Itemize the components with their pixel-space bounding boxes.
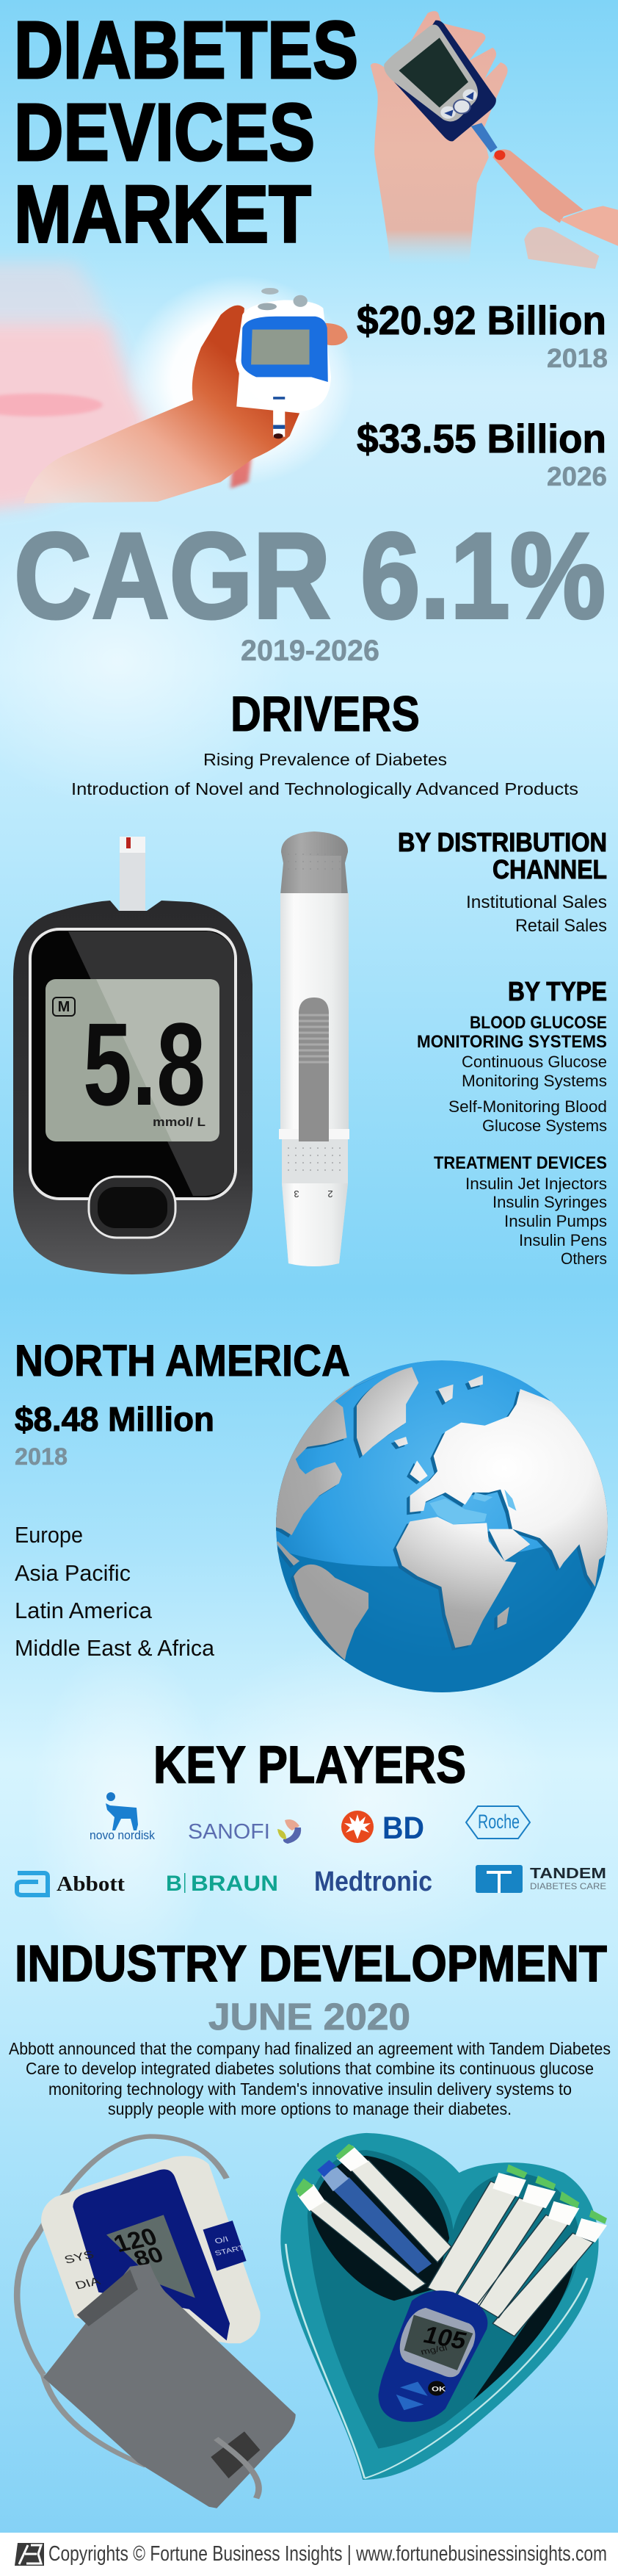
logo: Sanofi — [188, 1819, 301, 1844]
CAGR heading: 2019-2026 — [241, 635, 379, 667]
logo: Tandem: DIABETES CARE — [530, 1881, 606, 1891]
illustration: blood pressure monitor: O/I — [214, 2234, 230, 2245]
stat: 2026 market value: 2026 — [547, 461, 607, 491]
industry development body text: monitoring technology with Tandem's innovative insulin delivery systems to — [48, 2079, 572, 2099]
regional block: $8.48 Million — [15, 1400, 214, 1438]
handheld meter: 105 — [420, 2321, 470, 2355]
logo: BD: BD — [382, 1811, 424, 1846]
cuff — [43, 2264, 296, 2508]
logo: Roche — [466, 1806, 530, 1839]
illustration: blood pressure monitor: 120 — [109, 2223, 161, 2258]
icon: Fortune Business Insights logo — [15, 2543, 44, 2566]
logo: Medtronic: Medtronic — [314, 1866, 432, 1897]
illustration: blood pressure monitor: SYS — [62, 2248, 96, 2266]
regional block: Latin America — [15, 1598, 153, 1623]
illustration: blood pressure monitor — [17, 2137, 296, 2508]
drivers — [71, 686, 578, 798]
drivers: DRIVERS — [230, 686, 420, 742]
insulin pens — [296, 2144, 607, 2337]
handheld meter — [379, 2290, 487, 2422]
title: MARKET — [14, 169, 311, 260]
segments: by type: MONITORING SYSTEMS — [417, 1032, 607, 1052]
stat: 2018 market value — [357, 297, 608, 373]
segments: by type — [417, 976, 607, 1268]
logo: Novo Nordisk: novo nordisk — [90, 1828, 155, 1842]
logo: B. Braun: BRAUN — [191, 1872, 278, 1896]
industry development heading: JUNE 2020 — [208, 1996, 410, 2038]
drivers: Rising Prevalence of Diabetes — [203, 750, 447, 769]
image: hand holding glucose meter — [371, 11, 618, 269]
logo: Abbott: Abbott — [57, 1872, 125, 1896]
drivers: Introduction of Novel and Technologically Advanced Products — [71, 779, 578, 798]
illustration: lancing pen — [279, 831, 349, 1266]
segments: by distribution channel: CHANNEL — [492, 854, 607, 884]
handheld meter: OK — [432, 2386, 446, 2393]
test strip — [120, 837, 145, 916]
regional block — [15, 1336, 350, 1661]
meter button — [89, 1177, 175, 1238]
meter screen — [46, 979, 219, 1141]
segments: by type: TREATMENT DEVICES — [434, 1153, 607, 1173]
title: DEVICES — [14, 87, 315, 178]
title: DIABETES — [14, 5, 358, 95]
segments: by type: Insulin Pumps — [504, 1212, 607, 1230]
stat: 2026 market value: $33.55 Billion — [357, 416, 606, 461]
logo: Tandem: TANDEM — [530, 1866, 606, 1882]
segments: by distribution channel — [398, 827, 607, 936]
segments: by type: Monitoring Systems — [462, 1072, 607, 1090]
illustration: lancing pen: 2 — [327, 1188, 333, 1199]
illustration: blood pressure monitor: START — [214, 2244, 246, 2257]
illustration: glucose meter — [13, 837, 252, 1274]
stat: 2018 market value: 2018 — [547, 343, 608, 373]
illustration: globe — [269, 1360, 615, 1697]
regional block: Asia Pacific — [15, 1560, 131, 1586]
title — [14, 5, 358, 260]
regional block: 2018 — [15, 1443, 68, 1470]
industry development body text: supply people with more options to manage their diabetes. — [108, 2099, 512, 2118]
footer bar — [0, 2533, 618, 2576]
segments: by type: Continuous Glucose — [462, 1053, 607, 1071]
segments: by type: Insulin Pens — [519, 1231, 607, 1249]
image: blood glucose test in hand — [0, 262, 355, 511]
segments: by distribution channel: Retail Sales — [515, 916, 607, 936]
illustration: heart dish with insulin pens and meter — [280, 2133, 607, 2480]
logo: BD — [341, 1811, 424, 1846]
regional block: Europe — [15, 1522, 83, 1548]
segments: by type: Self-Monitoring Blood — [448, 1097, 607, 1116]
stat: 2018 market value: $20.92 Billion — [357, 297, 606, 343]
industry development body text — [9, 2039, 611, 2118]
meter screen: 5.8 — [83, 998, 206, 1130]
key players heading: KEY PLAYERS — [153, 1736, 466, 1794]
illustration: blood pressure monitor: 80 — [130, 2242, 167, 2271]
meter screen: mmol/ L — [153, 1115, 206, 1129]
segments: by type: Glucose Systems — [482, 1116, 607, 1135]
segments: by type: BY TYPE — [508, 976, 607, 1006]
logo: Sanofi: SANOFI — [188, 1820, 270, 1844]
logo: Roche: Roche — [478, 1811, 520, 1833]
regional block: Middle East & Africa — [15, 1635, 215, 1661]
industry development heading — [15, 1935, 607, 2038]
stat: 2026 market value — [357, 416, 607, 491]
regional block: NORTH AMERICA — [15, 1336, 350, 1385]
handheld meter: mg/dl — [419, 2343, 448, 2356]
logo: B. Braun: B — [166, 1872, 182, 1896]
segments: by type: Insulin Syringes — [492, 1193, 607, 1211]
segments: by type: Insulin Jet Injectors — [465, 1175, 607, 1193]
logo: Tandem — [476, 1865, 606, 1893]
illustration: lancing pen: 3 — [294, 1188, 299, 1199]
illustration: blood pressure monitor: DIA — [73, 2275, 102, 2292]
segments: by type: Others — [561, 1249, 607, 1268]
logo: Abbott — [17, 1872, 125, 1896]
logo: Novo Nordisk — [90, 1792, 155, 1842]
segments: by distribution channel: Institutional Sales — [466, 892, 607, 912]
meter screen: M — [58, 999, 70, 1015]
